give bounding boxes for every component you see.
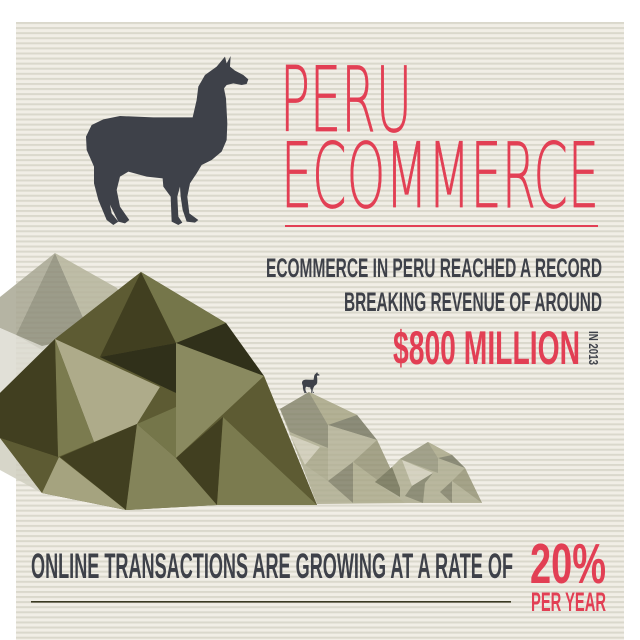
- revenue statement: [266, 253, 602, 317]
- year note: IN 2013: [586, 331, 601, 365]
- title: [280, 48, 599, 229]
- title: PERU: [280, 48, 412, 153]
- small right mountain: [375, 442, 482, 503]
- front large olive mountain: [0, 272, 317, 510]
- title underline: [285, 225, 598, 227]
- llama silhouette: [86, 56, 248, 225]
- statement underline: [31, 601, 511, 603]
- back pale mountain: [0, 253, 122, 493]
- middle mountain: [280, 392, 408, 504]
- small llama on peak: [302, 372, 320, 393]
